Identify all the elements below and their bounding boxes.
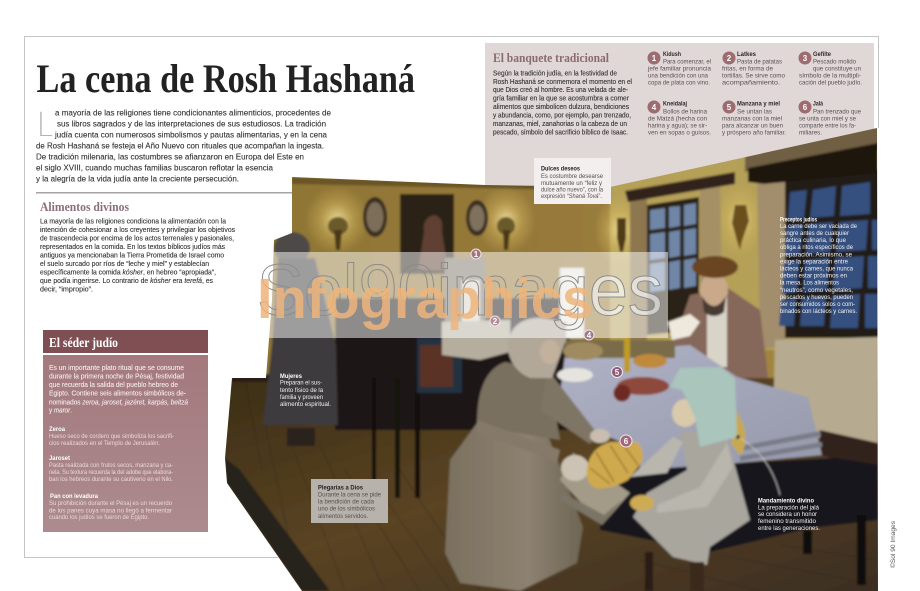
panel: El banquete tradicional: Según la tradición judía, en la festividad de (493, 68, 617, 78)
panel: banquet background (485, 43, 874, 193)
panel: Alimentos divinos: La mayoría de las religiones condiciona la alimentación con la (40, 216, 226, 226)
item 5: Manzana y miel: Se untan las (737, 108, 772, 116)
panel: El séder judío: que recuerda la salida del pueblo hebreo de (49, 382, 178, 389)
wall lights (309, 190, 756, 252)
panel header (43, 330, 208, 353)
watermark overlay band (258, 252, 668, 338)
intro text block: a mayoría de las religiones tiene condicionantes alimenticios, procedentes de (55, 108, 331, 118)
copyright credit: ©Sol 90 Images (889, 520, 897, 568)
callout: Preceptos judíos: “neutros”, como vegetales, (780, 287, 853, 294)
panel: Alimentos divinos: que podía ingerirse. Lo contrario de kósher era terefá, es (40, 276, 213, 285)
item 4: Kneidalaj: ven en sopas o guisos. (648, 130, 711, 136)
illustration: family dinner scene (220, 120, 880, 591)
panel: El séder judío: Pasta realizada con frutos secos, manzana y ca- (49, 462, 173, 469)
item 4: Kneidalaj: Kneidalaj (663, 100, 687, 108)
callout: Preceptos judíos: sangre antes de cualquier (780, 230, 850, 237)
item 3: Gefilte: Pescado molido (813, 58, 857, 66)
wainscot and bench (773, 337, 878, 445)
portraits (363, 194, 488, 274)
heading: El banquete tradicional (493, 50, 609, 65)
marker 6: 6 (624, 437, 629, 446)
callout: Preceptos judíos: La carne debe ser vaciada de (780, 223, 857, 230)
item 5: Manzana y miel: manzanas con la miel (722, 116, 782, 122)
callout: Preceptos judíos: obliga a ritos específicos de (780, 244, 853, 251)
item 6: Jalá: 6 (803, 103, 808, 112)
item 1: Kidush: copa de plata con vino. (648, 80, 710, 86)
panel: El séder judío: cuando los judíos se fueron de Egipto. (49, 514, 149, 521)
callout: Plegarias a Dios (311, 479, 388, 523)
callout: Mandamiento divino: femenino transmitido (758, 518, 816, 525)
callout: Dulces deseos: mutuamente un “feliz y (541, 180, 603, 187)
item 1: Kidush: Kidush (663, 51, 681, 58)
marker 5: 5 (615, 368, 620, 377)
intro text block: y la alegría de la vida judía ante la creciente persecución. (36, 174, 239, 184)
panel: Alimentos divinos: decir, “impropio”. (40, 284, 93, 294)
item 2: Latkes: 2 (727, 54, 732, 63)
panel: El séder judío: durante la primera noche de Pésaj, festividad (49, 374, 184, 380)
seated guest and shadowed chair (417, 258, 584, 393)
panel: El séder judío: de los panes cuya masa no llegó a fermentar (49, 508, 172, 514)
callout pointer (736, 435, 780, 495)
callout: Dulces deseos (534, 158, 611, 204)
callout: Dulces deseos: expresión “Shaná Tová”. (541, 193, 602, 200)
item 6: Jalá: se unta con miel y se (799, 116, 857, 122)
item 3: Gefilte: símbolo de la multipli- (799, 72, 861, 80)
callout: Preceptos judíos: lácteos y carnes, que nunca (780, 266, 853, 272)
table with cloth (557, 338, 822, 470)
marker 2 (490, 316, 500, 326)
panel: Alimentos divinos: de trascendecia por encima de los actos terrenales y pasionales, (40, 234, 234, 242)
item 1: Kidush: jefe familiar pronuncia (647, 66, 712, 72)
panel: El séder judío: Zeroa (49, 426, 66, 433)
item 6: Jalá (798, 100, 862, 136)
panel: El séder judío: y maror. (49, 408, 72, 414)
callout: Dulces deseos: Es costumbre desearse (541, 173, 603, 180)
watermark text: orange: Infographics (257, 267, 593, 331)
panel: El séder judío: Su prohibición durante el Pésaj es un recuerdo (49, 500, 173, 507)
panel: El séder judío: nela. Su textura recuerda la del adobe que elabora- (49, 469, 173, 476)
callout: Mujeres (280, 373, 331, 408)
callout: Preceptos judíos: la mesa. Los alimentos (780, 280, 839, 287)
wall (232, 177, 878, 380)
panel: El séder judío: Jaroset (49, 455, 70, 462)
callout: Mujeres: Preparan el sus- (280, 380, 322, 386)
callout: Preceptos judíos (780, 216, 857, 315)
callout: Plegarias a Dios: Durante la cena se pide (318, 492, 381, 498)
number markers in scene (471, 249, 632, 447)
item 4: Kneidalaj: 4 (652, 103, 657, 112)
dark furniture background (335, 298, 570, 430)
intro text block: De tradición milenaria, las costumbres se afianzaron en Europa del Este en (36, 152, 304, 162)
intro text block: sus libros sagrados y de las interpretaciones de sus estudiosos. La tradición (57, 118, 326, 128)
callout: Plegarias a Dios: Plegarias a Dios (318, 484, 363, 492)
callout: Preceptos judíos: Preceptos judíos (780, 216, 817, 224)
floor (220, 378, 880, 591)
curtains and window 1 (625, 172, 735, 345)
marker 1: 1 (474, 250, 479, 259)
title: La cena de Rosh Hashaná (36, 56, 415, 101)
item 1: Kidush: Para comenzar, el (663, 58, 711, 66)
callout: Mandamiento divino: entre las generaciones. (758, 525, 820, 532)
item 6: Jalá: Jalá (813, 100, 823, 108)
callout: Preceptos judíos: exige la separación entre (780, 258, 848, 265)
callout: Mujeres: Mujeres (280, 373, 302, 380)
callout: Plegarias a Dios: uno de los simbólicos (318, 506, 376, 512)
panel: El banquete tradicional: Rosh Hashaná se conmemora el momento en el (493, 77, 632, 86)
marker 5 (612, 366, 622, 378)
curtains and window 2 (748, 143, 880, 350)
panel: El banquete tradicional: manzanas, miel, zanahorias o la cabeza de un (493, 119, 627, 128)
item 3: Gefilte: cación del pueblo judío. (799, 80, 862, 86)
panel: Alimentos divinos: el suelo surcado por ríos de “leche y miel” y establecían (40, 259, 209, 268)
callout: Mujeres: familia y proveen (280, 394, 323, 401)
floor edge (225, 458, 330, 591)
marker 4 (584, 330, 594, 340)
standing woman at left (263, 232, 338, 446)
panel: El séder judío: Pan con levadura (50, 493, 99, 500)
callout: Mandamiento divino (758, 498, 820, 532)
callout: Preceptos judíos: deben estar próximos en (780, 273, 847, 280)
intro text block: judía cuenta con numerosos simbolismos y pautas alimentarias, y en la cena (54, 130, 327, 140)
marker 1 (471, 249, 481, 259)
seated man with fur hat (668, 256, 768, 378)
panel: El banquete tradicional: que Dios creó al hombre. Es una velada de ale- (493, 85, 629, 94)
panel: El banquete tradicional: pescado, símbolo del sacrificio bíblico de Isaac. (493, 128, 628, 136)
heading: El séder judío (49, 335, 118, 350)
callout: Preceptos judíos: ser consumidos solos o com- (780, 301, 855, 308)
panel: El séder judío: cios realizados en el Templo de Jerusalén. (49, 440, 160, 447)
item 2: Latkes: tortillas. Se sirve como (722, 72, 786, 80)
callout: Preceptos judíos: binados con lácteos y carnes. (780, 308, 857, 315)
callout: Plegarias a Dios: alimentos servidos. (318, 513, 368, 520)
item 2: Latkes: Latkes (737, 51, 757, 58)
challah bread (561, 429, 643, 488)
panel: El séder judío: nominados zeroa, jaroset, jazéret, karpás, beitzá (49, 400, 188, 406)
callout: Plegarias a Dios: la bendición de cada (318, 498, 374, 506)
panel: Alimentos divinos: intención de cohesionar a los creyentes y privilegiar los objetivos (40, 225, 235, 234)
girl with headscarf (630, 367, 750, 591)
item 2: Latkes (722, 51, 786, 86)
panel: El banquete tradicional (493, 50, 632, 136)
marker 6 (620, 435, 632, 447)
callout: Dulces deseos: Dulces deseos (541, 166, 580, 172)
marker 4: 4 (587, 331, 592, 340)
panel: El banquete tradicional: gría familiar en la que se acostumbra a comer (493, 94, 630, 102)
panel: El séder judío: Es un importante plato ritual que se consume (49, 365, 184, 372)
callout: Mandamiento divino: La preparación del jalá (758, 504, 819, 512)
callout: Mandamiento divino: Mandamiento divino (758, 498, 814, 504)
callout: Preceptos judíos: preparación. Asimismo, se (780, 251, 852, 258)
item 3: Gefilte (798, 51, 862, 86)
panel: El séder judío: Hueso seco de cordero que simboliza los sacrifi- (49, 433, 174, 440)
item 6: Jalá: comparte entre los fa- (799, 122, 856, 130)
item 2: Latkes: fritas, en forma de (722, 66, 774, 72)
item 1: Kidush (647, 51, 712, 86)
item 4: Kneidalaj (648, 100, 711, 136)
item 4: Kneidalaj: harina y agua); se sir- (648, 122, 707, 130)
item 5: Manzana y miel: 5 (727, 103, 732, 112)
panel: El séder judío: Egipto. Contiene seis alimentos simbólicos de- (49, 390, 187, 398)
panel: Alimentos divinos: representados en la comida. En los textos bíblicos judíos más (40, 242, 225, 251)
item 5: Manzana y miel (722, 100, 786, 136)
item 5: Manzana y miel: Manzana y miel (737, 100, 780, 108)
panel: El banquete tradicional: alimentos que simbolicen dulzura, bendiciones (493, 102, 629, 111)
item 4: Kneidalaj: de Matzá (hecha con (648, 116, 708, 122)
watermark text: outline: Sol90images (257, 251, 663, 331)
panel: Alimentos divinos (40, 199, 235, 294)
panel: El banquete tradicional: y abundancia, como, por ejemplo, pan trenzado, (493, 110, 631, 120)
panel: Alimentos divinos: antiguos ya mencionaban la Tierra Prometida de Israel como (40, 250, 224, 260)
callout: Mujeres: tento físico de la (280, 387, 323, 394)
intro text block (36, 104, 331, 184)
panel: El séder judío: ban los hebreos durante su cautiverio en el Nilo. (49, 476, 173, 483)
intro text block: el siglo XVIII, cuando muchas familias buscaron reflotar la esencia (36, 162, 273, 172)
panel: El séder judío (43, 330, 208, 532)
item 4: Kneidalaj: Bollos de harina (663, 108, 708, 116)
callout: Preceptos judíos: pescados y huevos, pueden (780, 294, 853, 301)
callout: Mujeres: alimento espiritual. (280, 401, 331, 408)
callout: Preceptos judíos: práctica culinaria, lo que (780, 237, 846, 244)
panel: Alimentos divinos: específicamente la comida kósher, en hebreo “apropiada”, (40, 268, 216, 276)
item 1: Kidush: una bendición con una (648, 72, 709, 80)
item 2: Latkes: acompañamiento. (722, 80, 780, 86)
callout: Mandamiento divino: se considera un honor (758, 511, 818, 518)
item 3: Gefilte: 3 (803, 54, 808, 63)
woman offering bread (445, 318, 630, 591)
drop cap: L (37, 104, 54, 146)
panel body (43, 355, 208, 532)
item 2: Latkes: Pasta de patatas (737, 58, 782, 66)
item 6: Jalá: Pan trenzado que (813, 108, 862, 116)
item 5: Manzana y miel: y próspero año familiar. (722, 130, 786, 136)
item 1: Kidush: 1 (652, 54, 657, 63)
marker 2: 2 (493, 317, 498, 326)
intro text block: de Rosh Hashaná se festeja el Año Nuevo con rituales que acompañan la ingesta. (36, 140, 324, 150)
item 3: Gefilte: que constituye un (813, 66, 862, 72)
item 5: Manzana y miel: para alcanzar un buen (722, 122, 784, 130)
item 3: Gefilte: Gefilte (813, 51, 832, 58)
item 6: Jalá: miliares. (799, 130, 822, 136)
callout: Dulces deseos: dulce año nuevo”, con la (541, 186, 603, 194)
heading: Alimentos divinos (40, 199, 129, 214)
